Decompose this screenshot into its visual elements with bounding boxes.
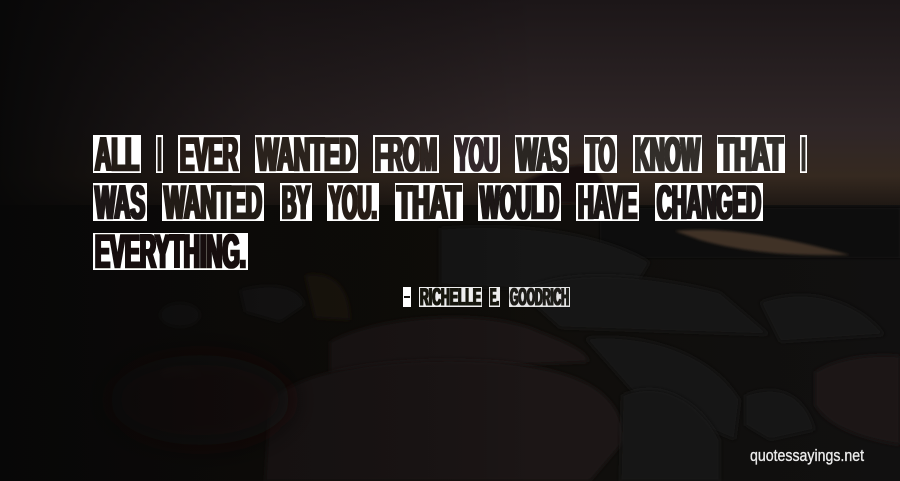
quote text: CHANGED (657, 176, 761, 228)
line 1 of quote: THAT (719, 128, 783, 180)
author attribution: E. (490, 284, 499, 311)
line 2 of quote: WOULD (480, 176, 559, 228)
line 1 of quote: WANTED (257, 128, 356, 180)
line 3 of quote (93, 224, 248, 278)
quote text (93, 128, 807, 278)
text: GOODRICH (510, 284, 569, 311)
text: I (802, 128, 805, 180)
line 2 of quote: WAS (95, 176, 145, 228)
line 2 of quote: THAT (397, 176, 461, 228)
line 1 of quote: EVER (180, 128, 238, 180)
watermark: quotessayings.net (750, 446, 864, 465)
line 1 of quote: FROM (375, 128, 437, 180)
line 2 of quote (93, 176, 763, 228)
line 2 of quote: HAVE (578, 176, 637, 228)
line 1 of quote: KNOW (635, 128, 700, 180)
line 2 of quote: BY (282, 176, 310, 228)
author attribution: RICHELLE (420, 284, 481, 311)
line 1 of quote: WAS (517, 128, 567, 180)
quote text: EVERYTHING. (95, 224, 246, 278)
line 1 of quote: YOU (456, 128, 498, 180)
line 1 of quote (93, 128, 807, 180)
line 2 of quote: WANTED (164, 176, 262, 228)
line 1 of quote: I (158, 128, 161, 180)
line 2 of quote: YOU. (329, 176, 377, 228)
line 1 of quote: ALL (95, 128, 139, 180)
line 1 of quote: TO (586, 128, 615, 180)
